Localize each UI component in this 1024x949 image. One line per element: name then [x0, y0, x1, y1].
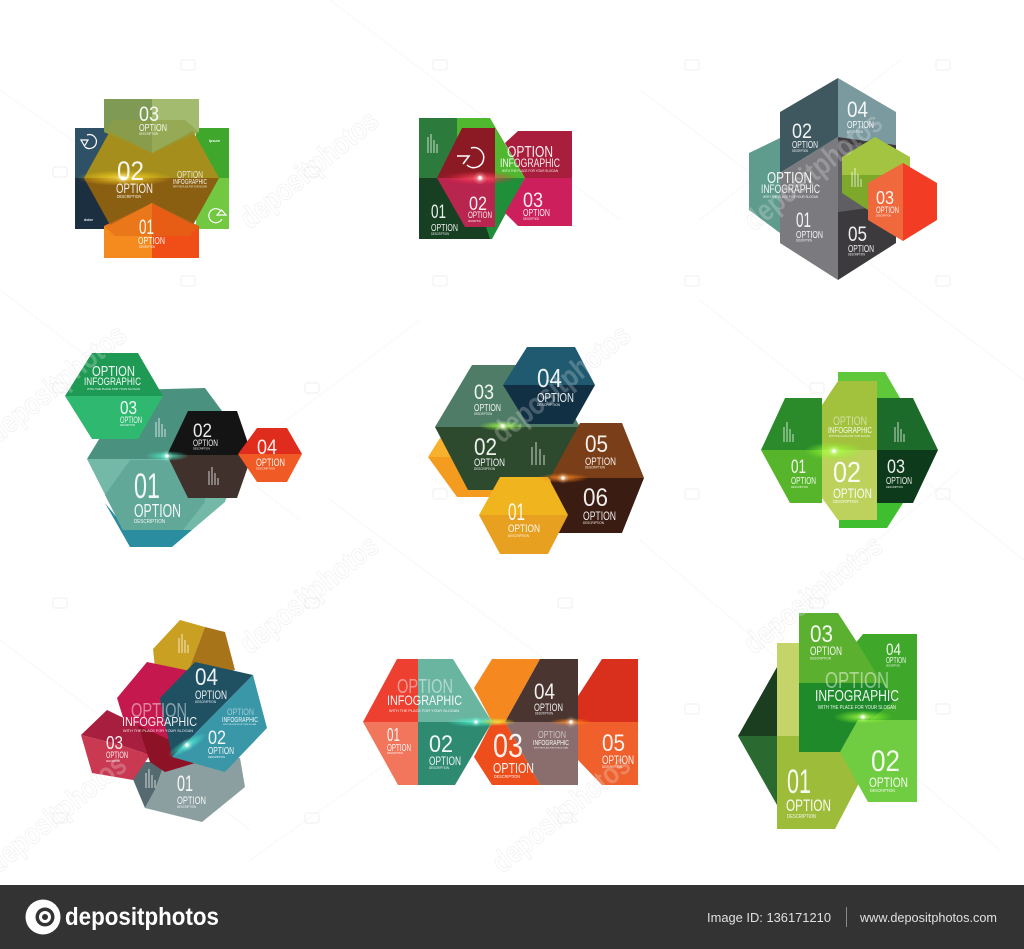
right red hexagon [578, 659, 638, 785]
label 02: OPTION [193, 438, 218, 448]
label 01: OPTION [796, 230, 823, 241]
label 01: OPTION [138, 236, 165, 247]
label option infographic [828, 414, 872, 438]
label 03: DESCRIPTION [120, 423, 135, 427]
label 06: DESCRIPTION [583, 521, 604, 525]
label option infographic small: INFOGRAPHIC [222, 717, 258, 724]
label 02: 02 [474, 434, 497, 461]
label option infographic: OPTION [177, 170, 203, 181]
label 04: OPTION [195, 688, 227, 702]
brown panel [505, 659, 578, 722]
label 05: 05 [585, 431, 608, 458]
label 03: DESCRIPTION [106, 759, 120, 763]
label 04: OPTION [886, 656, 906, 665]
label option infographic: WITH THE PLACE FOR YOUR SLOGAN [763, 195, 818, 199]
blue hexagon [503, 347, 595, 424]
label option infographic: OPTION [833, 414, 867, 428]
label 03: OPTION [810, 644, 842, 658]
label option infographic: INFOGRAPHIC [387, 692, 462, 708]
lime panel [777, 643, 858, 829]
label 02: OPTION [474, 457, 505, 469]
label 04: OPTION [256, 457, 285, 469]
label 05: OPTION [585, 456, 616, 468]
label 01: 01 [787, 763, 811, 801]
label 01: DESCRIPTION [139, 245, 155, 249]
label 02 [116, 156, 153, 199]
label 03: 03 [139, 103, 159, 126]
label 02: OPTION [792, 140, 818, 151]
infographic 4: green, teal, black and red hexagons [65, 353, 302, 547]
right dark panel [877, 398, 938, 503]
label 02 [833, 457, 872, 504]
label 02: OPTION [869, 774, 908, 790]
label option infographic [761, 170, 820, 199]
label 02: DESCRIPTION [193, 446, 210, 450]
footer bar [0, 885, 1024, 949]
label 01: DESCRIPTION [791, 485, 808, 489]
label 01: OPTION [508, 523, 540, 535]
label option infographic: OPTION [92, 363, 135, 380]
label 03: OPTION [523, 208, 550, 219]
label 05 [585, 431, 616, 470]
label option infographic small: WITH THE PLACE FOR YOUR SLOGAN [534, 746, 568, 750]
label 04 [256, 436, 285, 470]
gold hexagon [153, 620, 235, 680]
label 04 [537, 363, 574, 407]
central X shape [84, 120, 219, 236]
label 04: 04 [537, 363, 562, 393]
label 01: 01 [387, 725, 400, 745]
label 04: OPTION [534, 702, 563, 714]
label option infographic centre: INFOGRAPHIC [122, 714, 197, 729]
red hexagon [238, 428, 302, 482]
label 02: DESCRIPTION [474, 467, 495, 471]
label 01: DESCRIPTION [787, 814, 816, 820]
label option infographic: INFOGRAPHIC [173, 177, 207, 186]
label 01: DESCRIPTION [177, 805, 196, 809]
label 01: OPTION [791, 476, 816, 487]
icon: bars right [895, 422, 904, 442]
watermarks: depositphotos [738, 106, 889, 237]
label option infographic: OPTION [397, 676, 453, 698]
right green panel [196, 128, 229, 229]
green hexagon [842, 137, 910, 210]
maroon centre panel [437, 128, 495, 227]
glow [145, 450, 189, 462]
label 03: DESCRIPTION [523, 217, 539, 221]
label 03: 03 [474, 381, 494, 404]
label 03 [120, 398, 142, 427]
right upper green panel [850, 634, 917, 720]
label 02: OPTION [116, 180, 153, 196]
label 01: DESCRIPTION [134, 519, 165, 525]
label 02 [208, 728, 234, 759]
label 02: OPTION [208, 746, 234, 757]
infographic 2: green and crimson panels [419, 118, 572, 239]
label ipsum: Ipsum [209, 138, 220, 143]
label 05: 05 [848, 223, 867, 246]
watermarks: depositphotos [234, 529, 385, 660]
label option infographic small [222, 707, 258, 726]
label 04: DESCRIPTION [537, 402, 560, 407]
crimson right hexagon [505, 131, 572, 226]
label option infographic [84, 363, 141, 391]
label 02: DESCRIPTION [429, 766, 449, 770]
infographic 6: green three column hexagon [761, 372, 938, 528]
label 03 [106, 733, 128, 763]
teal left hexagon [749, 138, 780, 233]
dark green left panel [419, 118, 490, 239]
label 03 [493, 727, 534, 779]
glow [165, 729, 209, 761]
label 02: OPTION [468, 210, 492, 220]
label 02 [792, 120, 818, 153]
middle lime panel [822, 381, 877, 520]
green hexagon [435, 365, 580, 490]
label 02: OPTION [833, 485, 872, 501]
label 03 [810, 621, 842, 660]
label option infographic: INFOGRAPHIC [761, 182, 820, 196]
back green top and bottom [838, 372, 905, 528]
yellow back hexagon [428, 438, 495, 497]
watermarks [0, 104, 889, 879]
infographic 7: tilted hexagon cluster [81, 620, 267, 822]
icon: refresh [457, 148, 484, 168]
label option infographic: INFOGRAPHIC [828, 425, 872, 435]
orange top panel [474, 659, 540, 722]
label 03: 03 [810, 621, 833, 648]
label 04: DESCRIPTION [886, 664, 900, 668]
label 04: 04 [847, 97, 868, 122]
label 02: DESCRIPTION [468, 219, 481, 223]
icon: refresh right [209, 209, 226, 223]
left green panel [761, 398, 822, 503]
label 03: OPTION [106, 750, 128, 760]
label 04: OPTION [847, 120, 874, 131]
green hexagon [65, 353, 163, 439]
label 01 [796, 209, 823, 242]
label 01 [791, 457, 816, 489]
label option infographic [173, 170, 207, 188]
label 03: OPTION [120, 415, 142, 425]
label 03: OPTION [474, 403, 501, 414]
infographic 9: layered green shapes [738, 613, 917, 829]
label 03 [139, 103, 167, 136]
label 01: OPTION [431, 223, 458, 234]
label 02: 02 [833, 457, 861, 489]
black hexagon [167, 411, 252, 498]
label 04: DESCRIPTION [847, 130, 863, 134]
label 04: 04 [257, 436, 277, 459]
glow [804, 442, 864, 460]
label 05: OPTION [848, 244, 874, 255]
infographic 8: horizontal chevron band [363, 659, 638, 785]
label 03 [886, 457, 912, 489]
label 01: 01 [139, 216, 154, 239]
label 04 [847, 97, 874, 134]
label 03: 03 [106, 733, 123, 753]
label 02: 02 [871, 745, 900, 778]
glows [446, 716, 593, 728]
label 02: 02 [469, 194, 487, 215]
label 02: DESCRIPTION [870, 788, 895, 793]
label 03: DESCRIPTION [494, 774, 520, 779]
infographic 1: cross with central X shape [75, 99, 229, 258]
glow [77, 170, 173, 186]
label option infographic centre: WITH THE PLACE FOR YOUR SLOGAN [123, 728, 193, 733]
label 02: 02 [117, 156, 144, 186]
label option infographic [387, 676, 462, 713]
label 02 [193, 421, 218, 450]
label 01 [786, 763, 831, 820]
label 02 [474, 434, 505, 471]
label 01: OPTION [177, 795, 206, 807]
label 04: OPTION [537, 390, 574, 405]
glow [833, 710, 893, 724]
watermarks: depositphotos [486, 318, 637, 449]
label option infographic small: OPTION [227, 707, 254, 717]
label option infographic: WITH THE PLACE FOR YOUR SLOGAN [502, 169, 558, 173]
label 01: DESCRIPTION [508, 534, 529, 538]
label 03: OPTION [493, 760, 534, 777]
top green panel [799, 613, 882, 683]
label 03: 03 [493, 727, 523, 764]
label option infographic centre: OPTION [131, 700, 187, 722]
label 05: DESCRIPTION [585, 466, 605, 470]
crimson hexagon [117, 662, 195, 772]
website url: www.depositphotos.com [859, 910, 997, 925]
grey lower panel [505, 722, 578, 785]
infographic 5: six hexagon honeycomb [428, 347, 644, 554]
top panel [104, 99, 199, 153]
label option infographic: OPTION [507, 144, 553, 161]
label 03: 03 [120, 398, 137, 418]
label 02: 02 [193, 421, 212, 442]
large grey hexagon [780, 78, 896, 280]
red left hexagon [363, 659, 418, 785]
label 02: 02 [208, 728, 226, 749]
label option infographic small: WITH THE PLACE FOR YOUR SLOGAN [223, 723, 256, 726]
watermarks: depositphotos [738, 529, 889, 660]
label option infographic: INFOGRAPHIC [500, 156, 560, 170]
watermarks: depositphotos [234, 104, 385, 235]
label option infographic: WITH THE PLACE FOR YOUR SLOGAN [389, 708, 459, 713]
label 01: OPTION [134, 501, 181, 521]
watermarks: depositphotos [486, 748, 637, 879]
grey hexagon [132, 758, 245, 822]
label 05 [602, 730, 634, 769]
label 04 [534, 679, 563, 716]
dark left triangle [738, 667, 777, 805]
label option infographic: OPTION [767, 170, 812, 187]
icon: bars [428, 134, 437, 153]
icon: bars [852, 168, 861, 187]
label 03: OPTION [139, 123, 167, 134]
label 02 [429, 731, 461, 770]
centre dark green panel [799, 683, 895, 752]
infographic 3: grey hexagon cluster [749, 78, 937, 280]
label 01 [508, 499, 540, 538]
label 02: 02 [792, 120, 812, 143]
teal panel [418, 659, 492, 785]
label 05: DESCRIPTION [602, 765, 622, 769]
label 04: DESCRIPTION [195, 700, 216, 704]
label 01: 01 [134, 467, 160, 506]
label 01: DESCRIPTION [387, 751, 403, 755]
label 06: OPTION [583, 509, 616, 523]
label dolor: dolor [84, 217, 93, 222]
label 03 [523, 189, 550, 221]
label 01 [138, 216, 165, 249]
label 04: DESCRIPTION [256, 466, 275, 470]
label 02: DESCRIPTION [117, 194, 141, 199]
icon: bars gold [179, 634, 188, 653]
label 04: 04 [886, 640, 901, 659]
label 04: 04 [534, 679, 555, 704]
label option infographic: WITH THE PLACE FOR YOUR SLOGAN [818, 705, 896, 711]
teal hexagon [160, 662, 267, 772]
red left hexagon [81, 710, 195, 780]
label 02 [468, 194, 492, 223]
label 05: OPTION [602, 753, 634, 767]
label 01: 01 [177, 771, 193, 796]
label 05 [848, 223, 874, 256]
blue teal back hexagon [105, 503, 192, 547]
glows [479, 420, 589, 484]
label 02: DESCRIPTION [833, 499, 858, 504]
label option infographic: OPTION [825, 667, 889, 693]
label 01: 01 [791, 457, 806, 478]
label option infographic: INFOGRAPHIC [84, 376, 141, 388]
bottom panel [104, 203, 199, 258]
label 01 [387, 725, 411, 755]
label option infographic small: INFOGRAPHIC [533, 740, 569, 747]
light green back shape [455, 118, 525, 239]
label 01: DESCRIPTION [796, 238, 812, 242]
label 02: DESCRIPTION [792, 149, 808, 153]
red hexagon [868, 163, 937, 241]
label option infographic centre [122, 700, 197, 733]
label 05: 05 [602, 730, 625, 757]
label 01: OPTION [387, 743, 411, 754]
label option infographic: WITH THE PLACE FOR YOUR SLOGAN [829, 435, 870, 438]
glow [442, 171, 518, 185]
logo wordmark: depositphotos [65, 903, 219, 931]
label 03: DESCRIPTION [810, 656, 831, 660]
label 02: DESCRIPTION [208, 755, 225, 759]
logo icon: camera [26, 900, 60, 934]
label 01: 01 [508, 499, 525, 526]
label 01 [431, 202, 458, 236]
label 04 [195, 664, 227, 704]
label option infographic: INFOGRAPHIC [815, 688, 899, 705]
label option infographic: WITH THE PLACE FOR YOUR SLOGAN [87, 387, 140, 391]
label 06: 06 [583, 484, 608, 512]
label 01: OPTION [786, 796, 831, 815]
label 03: 03 [887, 457, 905, 478]
label 02: 02 [429, 731, 453, 758]
label 03: OPTION [886, 476, 912, 487]
label 03 [474, 381, 501, 416]
right lower green panel [840, 720, 917, 802]
label 03: OPTION [876, 205, 899, 215]
left dark panel [75, 128, 112, 229]
label 03 [876, 188, 899, 218]
label 03: 03 [876, 188, 894, 208]
orange red lower panel [474, 722, 540, 785]
icon: bars upper [156, 418, 165, 437]
label 02: OPTION [429, 754, 461, 768]
label 01 [134, 467, 181, 525]
label 04: DESCRIPTION [535, 712, 553, 716]
label 05: DESCRIPTION [848, 252, 865, 256]
label option infographic [815, 667, 899, 711]
label 01: 01 [796, 209, 811, 232]
label 03: DESCRIPTION [886, 485, 903, 489]
label 01: DESCRIPTION [431, 232, 449, 236]
label option infographic small: OPTION [538, 730, 566, 741]
label 03: DESCRIPTION [139, 132, 158, 136]
label 03: 03 [523, 189, 543, 212]
label 03: DESCRIPTION [474, 412, 492, 416]
label 03: DESCRIPTION [876, 214, 891, 218]
icon: refresh left [81, 135, 96, 149]
amber front hexagon [479, 477, 568, 554]
label option infographic [500, 144, 560, 173]
big teal hexagon [87, 388, 240, 530]
label 01 [177, 771, 206, 809]
icon: bars [532, 442, 544, 465]
brown hexagon [550, 423, 644, 533]
label 02 [869, 745, 908, 793]
label option infographic small [533, 730, 569, 750]
label 06 [583, 484, 616, 525]
icon: bars left [784, 422, 793, 442]
label 04 [886, 640, 906, 668]
image id: Image ID: 136171210 [707, 910, 831, 925]
icon: bars grey [146, 769, 155, 788]
icon: bars lower [209, 467, 218, 485]
label 04: 04 [195, 664, 218, 691]
label option infographic: WITH THE PLACE FOR YOUR SLOGAN [173, 186, 207, 188]
label 01: 01 [431, 202, 446, 223]
